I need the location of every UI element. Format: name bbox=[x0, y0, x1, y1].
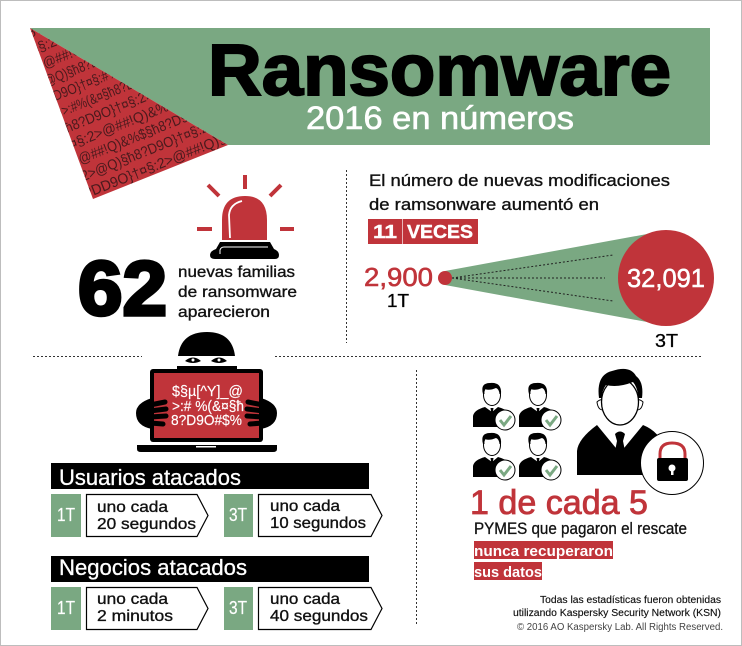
icon: large business person with lock bbox=[577, 369, 704, 494]
subtitle: 2016 en números bbox=[306, 100, 574, 136]
red cipher triangle: 2>@Q)§ħ8?D9O bbox=[30, 48, 115, 95]
red cipher triangle: _@>:#%(&¤§ħ8?D9O}† bbox=[42, 67, 160, 126]
red cipher triangle: §ħ8?D bbox=[11, 18, 54, 47]
number 62: 62 bbox=[78, 246, 167, 332]
highlight: nunca recuperaron: nunca recuperaron bbox=[474, 543, 613, 560]
stat caption: PYMES que pagaron el rescate bbox=[474, 519, 687, 538]
footer source note bbox=[513, 595, 723, 633]
badge: 11 veces: VECES bbox=[407, 222, 473, 242]
users 1T bbox=[51, 494, 208, 537]
value 32,091: 32,091 bbox=[627, 263, 705, 293]
users 3T: 10 segundos bbox=[270, 515, 366, 532]
value 2,900: 2,900 bbox=[364, 262, 433, 292]
users 3T: 3T bbox=[229, 505, 247, 525]
users header bar bbox=[51, 463, 369, 490]
businesses header bar: Negocios atacados bbox=[59, 555, 247, 580]
footer source note: utilizando Kaspersky Security Network (KSN) bbox=[513, 608, 721, 619]
label 1T: 1T bbox=[387, 291, 409, 311]
red cipher triangle: >@##!Q)&%$§ħ8?D9O}†¤§ bbox=[69, 96, 224, 171]
users header bar: Usuarios atacados bbox=[59, 465, 241, 490]
heading: modifications: El número de nuevas modificaciones bbox=[369, 171, 670, 190]
red cipher triangle: ?DD9O}†¤§:#%(&¤§ bbox=[37, 55, 145, 110]
large circle 3T bbox=[618, 230, 714, 326]
users 1T: 1T bbox=[57, 505, 75, 525]
businesses 1T: 1T bbox=[57, 598, 75, 618]
stat: 62 new families bbox=[78, 246, 297, 332]
heading: modifications bbox=[369, 171, 670, 214]
red cipher triangle: ?DD9O}†¤§:2>@##!Q)§ bbox=[82, 131, 229, 202]
businesses 1T: 2 minutos bbox=[97, 608, 173, 625]
highlight: sus datos: sus datos bbox=[474, 564, 542, 581]
red cipher triangle: )†¤§:2>@##!Q)&%$§µ[^Y] bbox=[55, 82, 215, 158]
small circle 1T bbox=[438, 271, 452, 285]
stat caption: aparecieron bbox=[178, 304, 270, 321]
stat caption bbox=[178, 264, 297, 321]
businesses 1T bbox=[51, 587, 208, 630]
left hand bbox=[136, 398, 166, 429]
icon: four small business people with checks bbox=[473, 383, 561, 480]
banner green band bbox=[30, 28, 710, 145]
heading: modifications: de ramsonware aumentó en bbox=[369, 195, 599, 214]
right hand bbox=[247, 398, 277, 429]
chart: growth cone bbox=[364, 230, 714, 351]
icon: siren bbox=[197, 175, 294, 259]
businesses 3T bbox=[224, 587, 382, 630]
businesses 3T: 3T bbox=[229, 598, 247, 618]
red cipher triangle: _§ħ8?D9O}†¤§:2>@##!Q bbox=[48, 71, 194, 142]
users 1T: uno cada bbox=[97, 499, 168, 516]
stat caption: nuevas familias bbox=[178, 264, 295, 281]
red cipher triangle: }†¤§:2>@ bbox=[18, 26, 79, 63]
icon: hacker with laptop bbox=[136, 332, 277, 452]
red cipher triangle: :2>@##!Q)§ bbox=[24, 38, 95, 79]
panel: businesses attacked bbox=[51, 555, 382, 630]
red cipher triangle: :2>@Q)§ħ8?D9O}†¤§:2>@ bbox=[76, 112, 230, 186]
screen cipher text: 8?D9O#$% bbox=[171, 413, 242, 429]
lock badge bbox=[640, 432, 704, 494]
panel: users attacked bbox=[51, 463, 382, 537]
banner bbox=[30, 28, 710, 199]
screen cipher text: $§µ[^Y]_@ bbox=[172, 384, 243, 400]
businesses 3T: 40 segundos bbox=[270, 608, 368, 625]
users 1T: 20 segundos bbox=[97, 516, 196, 533]
businesses header bar bbox=[51, 555, 369, 582]
title: Ransomware bbox=[208, 31, 671, 111]
businesses 3T: uno cada bbox=[270, 591, 340, 608]
screen cipher text: >:# %(&¤§ħ bbox=[172, 399, 244, 415]
badge: 11 veces: 11 bbox=[373, 222, 397, 242]
footer source note: Todas las estadísticas fueron obtenidas bbox=[540, 595, 721, 606]
screen cipher text bbox=[171, 384, 244, 429]
users 3T: uno cada bbox=[270, 498, 340, 515]
stat: 1 de cada 5: 1 de cada 5 bbox=[470, 484, 648, 522]
badge: 11 veces bbox=[368, 219, 478, 244]
footer source note: © 2016 AO Kaspersky Lab. All Rights Reserved. bbox=[517, 622, 723, 633]
stat caption: de ransomware bbox=[178, 284, 297, 301]
label 3T: 3T bbox=[655, 331, 678, 351]
businesses 1T: uno cada bbox=[97, 591, 168, 608]
users 3T bbox=[224, 494, 382, 537]
red cipher triangle bbox=[30, 28, 228, 199]
